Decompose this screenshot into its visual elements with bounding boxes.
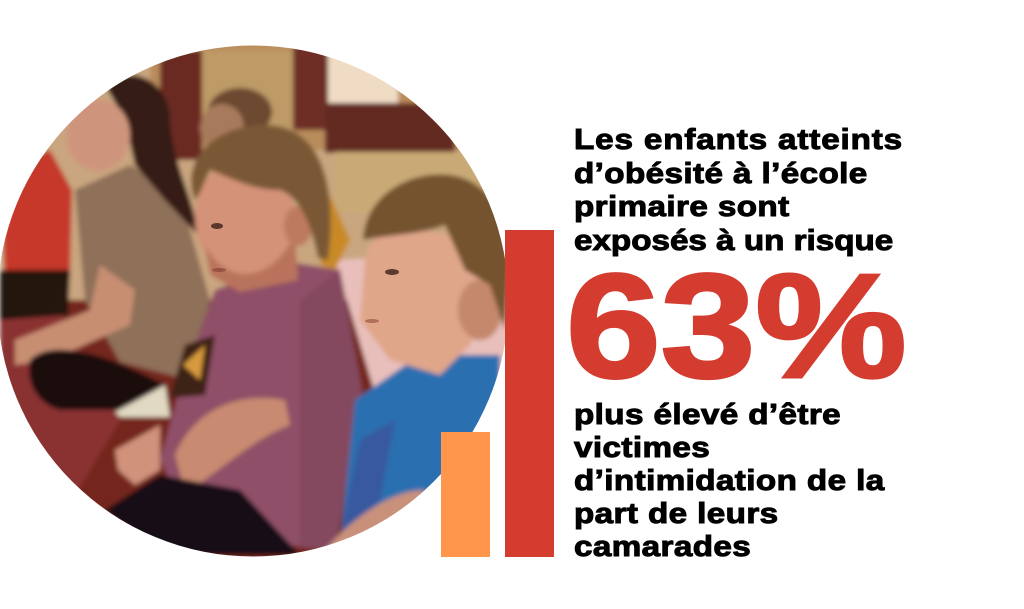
body text: bullying outcome: part de leurs [574,498,779,530]
statistic: 63%: 63% [566,244,907,409]
body text: bullying outcome: camarades [574,530,751,562]
bar: orange comparison [441,432,490,557]
heading text: risk statement: exposés à un risque [574,225,893,257]
photo: children seated in a classroom, circular crop [0,46,505,556]
body text: bullying outcome: d’intimidation de la [574,464,885,496]
heading text: risk statement: d’obésité à l’école [574,158,868,190]
body text: bullying outcome: plus élevé d’être [574,398,841,430]
facial details [211,223,399,323]
body text: bullying outcome [573,398,885,562]
bar chart: orange and red bars [441,230,554,557]
bar: red 63% [505,230,554,557]
heading text: risk statement: Les enfants atteints [574,124,903,156]
body text: bullying outcome: victimes [574,432,710,464]
heading text: risk statement [574,124,903,257]
heading text: risk statement: primaire sont [574,191,790,223]
